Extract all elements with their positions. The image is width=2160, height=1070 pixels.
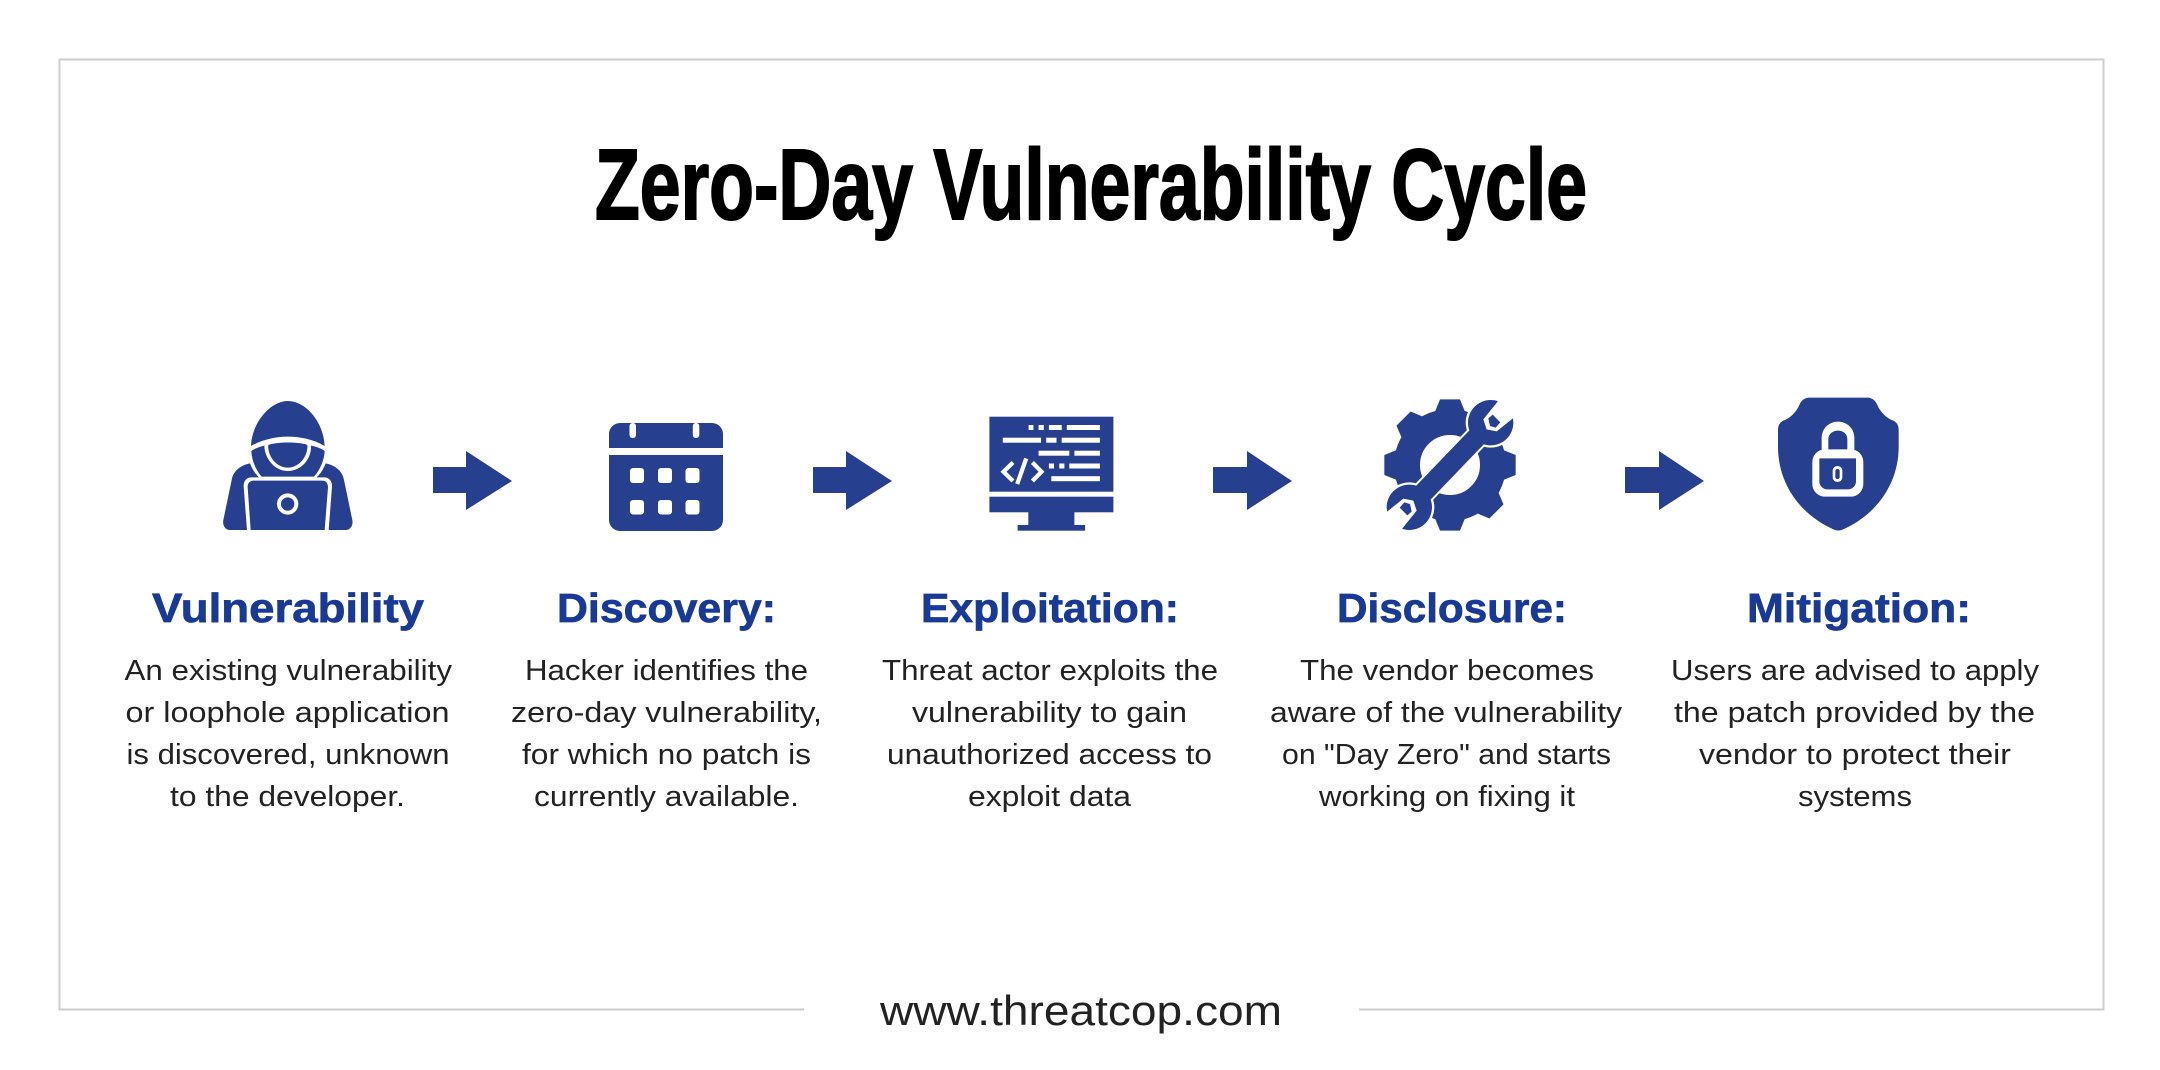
- text: mitigation description: [1671, 655, 2040, 813]
- arrow: vulnerability to discovery: [433, 451, 512, 510]
- icon: hooded hacker with laptop: [223, 401, 353, 530]
- heading: vulnerability: Vulnerability: [152, 585, 424, 631]
- text: discovery description: for which no patch is: [522, 739, 811, 771]
- column: mitigation: [1671, 585, 2040, 813]
- text: vulnerability description: to the developer.: [170, 781, 405, 813]
- text: vulnerability description: or loophole application: [126, 697, 450, 729]
- column: exploitation: [882, 585, 1218, 813]
- heading: disclosure: Disclosure:: [1337, 585, 1567, 631]
- icon: monitor with code: [989, 417, 1113, 531]
- arrow: disclosure to mitigation: [1625, 451, 1704, 510]
- text: disclosure description: The vendor becomes: [1300, 655, 1594, 687]
- text: disclosure description: on "Day Zero" and starts: [1282, 739, 1611, 771]
- text: mitigation description: the patch provided by the: [1674, 697, 2035, 729]
- text: discovery description: zero-day vulnerability,: [511, 697, 822, 729]
- icon: calendar: [609, 423, 723, 531]
- text: discovery description: currently available.: [534, 781, 799, 813]
- icon: shield with padlock: [1778, 398, 1899, 530]
- column: discovery: [511, 585, 822, 813]
- text: exploitation description: [882, 655, 1218, 813]
- text: exploitation description: exploit data: [968, 781, 1131, 813]
- title: Zero-Day Vulnerability Cycle: [595, 129, 1587, 241]
- text: disclosure description: aware of the vulnerability: [1270, 697, 1623, 729]
- arrow: discovery to exploitation: [813, 451, 892, 510]
- footer website url: www.threatcop.com: [879, 987, 1282, 1034]
- text: mitigation description: systems: [1798, 781, 1912, 813]
- column: disclosure: [1270, 585, 1623, 813]
- text: mitigation description: Users are advised to apply: [1671, 655, 2040, 687]
- text: disclosure description: [1270, 655, 1623, 813]
- arrow: exploitation to disclosure: [1213, 451, 1292, 510]
- text: exploitation description: vulnerability to gain: [912, 697, 1187, 729]
- text: vulnerability description: is discovered, unknown: [126, 739, 450, 771]
- text: exploitation description: Threat actor exploits the: [882, 655, 1218, 687]
- column: vulnerability: [124, 585, 453, 813]
- text: vulnerability description: [124, 655, 453, 813]
- text: discovery description: [511, 655, 822, 813]
- heading: mitigation: Mitigation:: [1747, 585, 1971, 631]
- text: exploitation description: unauthorized access to: [887, 739, 1212, 771]
- text: disclosure description: working on fixing it: [1318, 781, 1575, 813]
- text: discovery description: Hacker identifies the: [525, 655, 808, 687]
- text: mitigation description: vendor to protect their: [1699, 739, 2012, 771]
- text: vulnerability description: An existing vulnerability: [124, 655, 453, 687]
- heading: discovery: Discovery:: [557, 585, 776, 631]
- icon: gear with wrench: [1378, 397, 1522, 533]
- heading: exploitation: Exploitation:: [921, 585, 1179, 631]
